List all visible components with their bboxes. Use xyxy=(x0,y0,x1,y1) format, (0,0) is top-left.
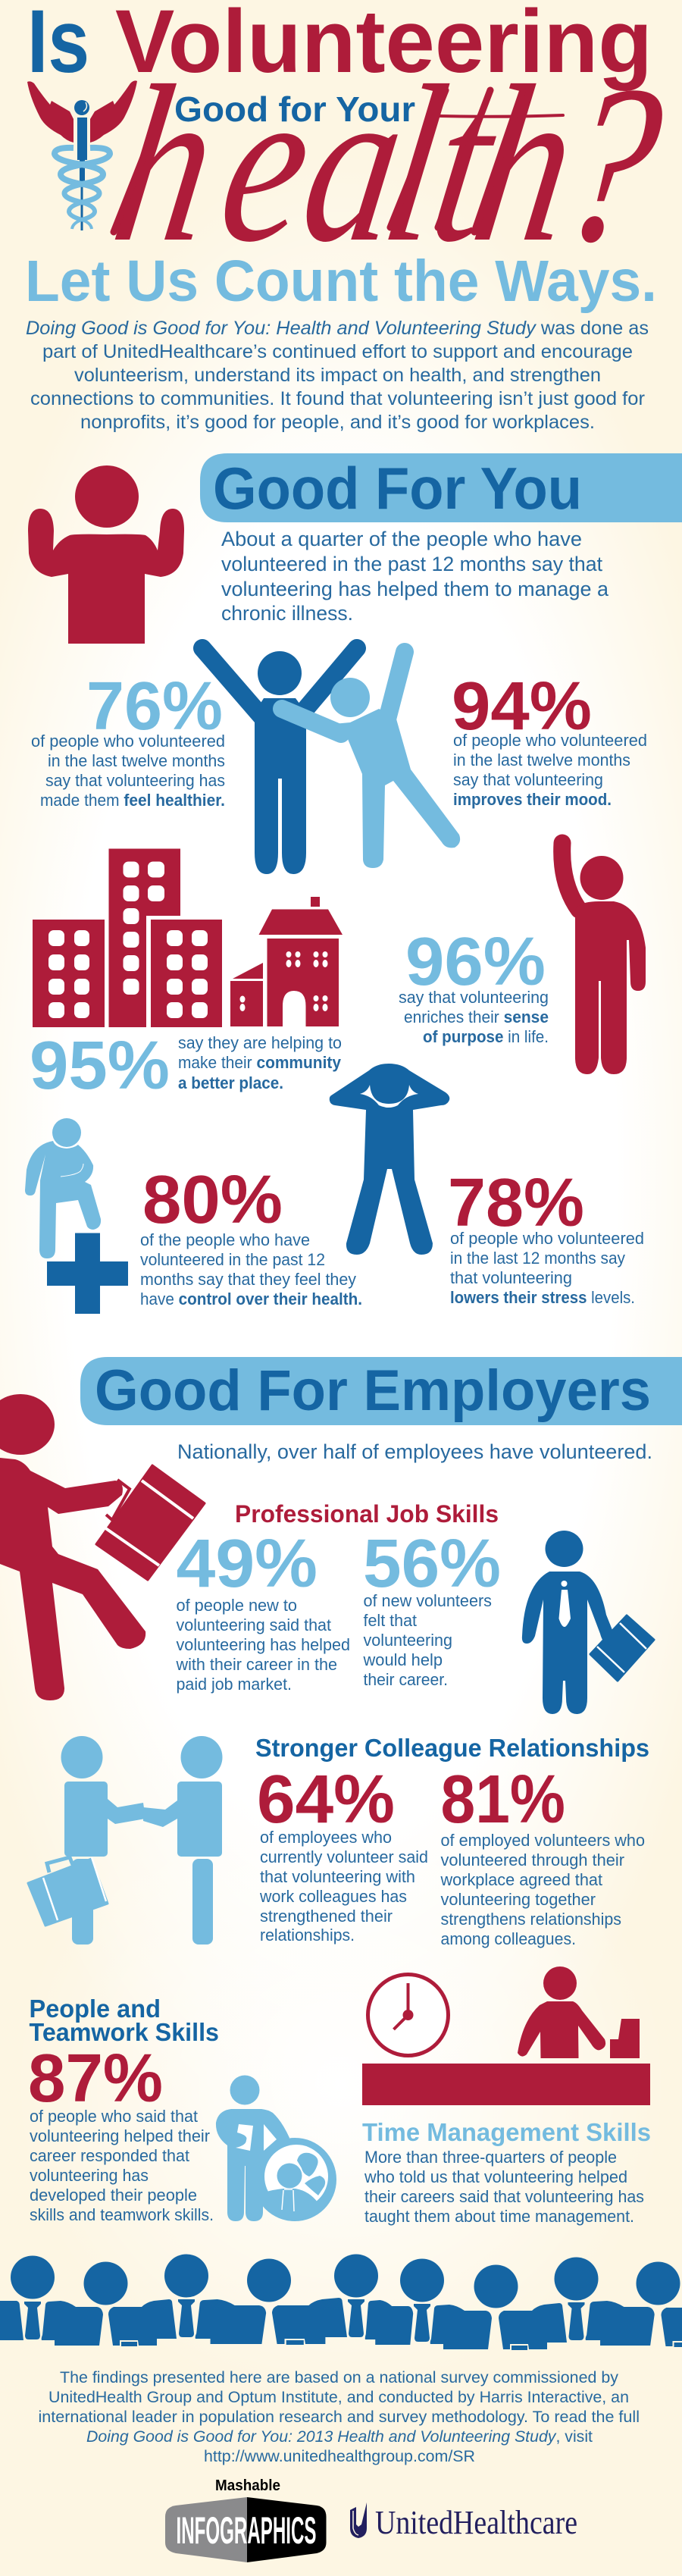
stat: 80%: have control over their health. xyxy=(140,1290,362,1308)
stat: 49%: with their career in the xyxy=(176,1655,337,1674)
title: Let Us Count the Ways. xyxy=(25,249,657,314)
stat: 81%: strengthens relationships xyxy=(441,1910,621,1929)
stat: 87%: of people who said that xyxy=(30,2107,198,2126)
stat: 64%: currently volunteer said xyxy=(260,1847,428,1866)
panel: good for you banner: Good For You xyxy=(213,455,582,522)
stat: 56%: of new volunteers xyxy=(364,1591,492,1610)
stat: 96% xyxy=(399,924,549,1046)
stat: 76%: say that volunteering has xyxy=(45,771,225,790)
footer text xyxy=(38,2368,640,2465)
stat: 64%: 64% xyxy=(257,1762,395,1838)
stat: 81%: volunteered through their xyxy=(441,1851,624,1869)
section: time management skills: Time Management Skills xyxy=(362,2118,651,2146)
stat: 87% xyxy=(28,2041,214,2224)
heading: professional job skills: Professional Job Skills xyxy=(235,1500,499,1528)
stat: 76% xyxy=(31,669,225,810)
icon: person stepping onto medical plus xyxy=(25,1118,128,1314)
stat: 87%: 87% xyxy=(28,2041,163,2117)
stat: 64%: of employees who xyxy=(260,1828,392,1847)
stat: 78% xyxy=(448,1165,644,1307)
text: nationally: Nationally, over half of employees have volunteered. xyxy=(177,1440,652,1463)
logo: unitedhealthcare: UnitedHealthcare xyxy=(375,2504,577,2541)
stat: 94%: say that volunteering xyxy=(453,770,603,789)
stat: 49%: volunteering has helped xyxy=(176,1635,350,1654)
section: time management skills: who told us that volunteering helped xyxy=(364,2167,627,2186)
text: chronic illness: chronic illness. xyxy=(221,602,353,625)
text: chronic illness xyxy=(221,528,608,625)
title: health? xyxy=(101,39,677,288)
stat: 81%: among colleagues. xyxy=(441,1929,576,1948)
stat: 56%: 56% xyxy=(363,1526,501,1602)
stat: 80%: 80% xyxy=(142,1162,283,1238)
stat: 81%: workplace agreed that xyxy=(440,1870,602,1889)
stat: 94%: in the last twelve months xyxy=(453,751,630,769)
stat: 49%: paid job market. xyxy=(176,1675,292,1694)
stat: 49% xyxy=(176,1526,350,1694)
icon: person raising hand xyxy=(562,843,646,1074)
stat: 49%: 49% xyxy=(176,1526,318,1602)
stat: 81%: 81% xyxy=(441,1762,565,1838)
stat: 94%: 94% xyxy=(452,669,592,744)
stat: 95%: make their community xyxy=(178,1053,342,1072)
text: chronic illness: volunteering has helped them to manage a xyxy=(221,578,608,600)
text: chronic illness: volunteered in the past 12 months say that xyxy=(221,553,603,575)
intro text: volunteerism, understand its impact on health, and strengthen xyxy=(74,365,601,386)
title: Good for Your xyxy=(174,89,415,129)
icon: row of business people xyxy=(0,2255,682,2350)
panel: good for employers banner: Good For Employers xyxy=(95,1359,651,1423)
stat: 94%: improves their mood. xyxy=(453,790,612,809)
stat: 76%: 76% xyxy=(86,669,223,744)
stat: 78%: that volunteering xyxy=(450,1268,572,1287)
stat: 80% xyxy=(140,1162,362,1308)
heading: people and teamwork skills: People and xyxy=(29,1995,161,2023)
stat: 78%: lowers their stress levels. xyxy=(450,1288,635,1307)
section: time management skills: their careers said that volunteering has xyxy=(364,2187,644,2206)
stat: 96%: say that volunteering xyxy=(399,988,549,1007)
stat: 81%: of employed volunteers who xyxy=(441,1831,645,1850)
footer text: UnitedHealth Group and Optum Institute, and conducted by Harris Interactive, an xyxy=(48,2388,629,2406)
stat: 78%: 78% xyxy=(448,1165,584,1241)
icon: two cheering people xyxy=(202,648,460,874)
intro text: part of UnitedHealthcare’s continued effort to support and encourage xyxy=(42,341,633,362)
stat: 64%: work colleagues has xyxy=(259,1887,407,1906)
stat: 76%: made them feel healthier. xyxy=(40,791,225,810)
logo: mashable infographics: INFOGRAPHICS xyxy=(176,2509,317,2552)
stat: 95%: say they are helping to xyxy=(178,1033,342,1052)
stat: 87%: developed their people xyxy=(30,2186,197,2205)
icon: walking business person with briefcase xyxy=(0,1394,205,1700)
stat: 76%: of people who volunteered xyxy=(31,732,225,751)
icon: two colleagues shaking hands xyxy=(28,1736,223,1945)
stat: 56% xyxy=(363,1526,501,1689)
stat: 96%: enriches their sense xyxy=(404,1008,549,1026)
stat: 94% xyxy=(452,669,647,809)
heading: stronger colleague relationships: Stronger Colleague Relationships xyxy=(255,1734,649,1762)
section: time management skills xyxy=(362,2118,651,2226)
footer text: international leader in population research and survey methodology. To read the full xyxy=(38,2408,640,2426)
stat: 64% xyxy=(257,1762,428,1945)
stat: 78%: in the last 12 months say xyxy=(450,1249,625,1268)
icon: clock xyxy=(368,1974,449,2056)
section: time management skills: More than three-quarters of people xyxy=(364,2148,617,2167)
icon: stressed person with hands behind head xyxy=(330,1064,449,1255)
stat: 64%: that volunteering with xyxy=(260,1867,415,1886)
stat: 87%: volunteering has xyxy=(30,2166,149,2185)
stat: 56%: felt that xyxy=(364,1611,417,1630)
text: chronic illness: About a quarter of the people who have xyxy=(221,528,582,550)
stat: 87%: career responded that xyxy=(30,2146,189,2165)
icon: person at desk with register xyxy=(362,1966,650,2105)
logo: mashable infographics: Mashable xyxy=(215,2477,280,2494)
stat: 95%: a better place. xyxy=(178,1073,283,1092)
stat: 49%: volunteering said that xyxy=(176,1615,331,1634)
stat: 95% xyxy=(30,1028,342,1104)
stat: 56%: their career. xyxy=(364,1670,448,1689)
footer text: Doing Good is Good for You: 2013 Health and Volunteering Study, visit xyxy=(86,2427,593,2446)
icon: person holding team circle xyxy=(216,2076,336,2221)
logo: mashable infographics xyxy=(165,2477,326,2562)
icon: city buildings and house xyxy=(33,849,343,1027)
stat: 76%: in the last twelve months xyxy=(48,751,225,770)
icon: business person with tie and briefcase xyxy=(522,1531,654,1714)
stat: 78%: of people who volunteered xyxy=(450,1229,644,1248)
stat: 64%: strengthened their xyxy=(260,1907,393,1926)
intro text: nonprofits, it’s good for people, and it’s good for workplaces. xyxy=(80,412,595,433)
stat: 80%: of the people who have xyxy=(140,1230,310,1249)
footer text: The findings presented here are based on a national survey commissioned by xyxy=(60,2368,618,2386)
stat: 80%: months say that they feel they xyxy=(140,1270,356,1289)
stat: 56%: volunteering xyxy=(364,1631,452,1650)
intro text: connections to communities. It found that volunteering isn’t just good for xyxy=(30,388,645,409)
heading: people and teamwork skills: Teamwork Skills xyxy=(29,2018,219,2046)
intro text: Doing Good is Good for You: Health and Volunteering Study was done as xyxy=(26,318,649,339)
stat: 96%: of purpose in life. xyxy=(423,1027,549,1046)
icon: flexing person xyxy=(28,465,184,644)
intro text xyxy=(26,318,649,433)
stat: 87%: skills and teamwork skills. xyxy=(30,2205,214,2224)
stat: 56%: would help xyxy=(363,1650,443,1669)
stat: 81%: volunteering together xyxy=(441,1890,596,1909)
stat: 80%: volunteered in the past 12 xyxy=(140,1250,325,1269)
footer text: http://www.unitedhealthgroup.com/SR xyxy=(204,2447,475,2465)
section: time management skills: taught them about time management. xyxy=(364,2207,634,2226)
stat: 94%: of people who volunteered xyxy=(453,731,647,750)
icon: caring hands with caduceus xyxy=(27,80,137,230)
stat: 95%: 95% xyxy=(30,1028,170,1104)
stat: 49%: of people new to xyxy=(176,1596,297,1615)
stat: 87%: volunteering helped their xyxy=(30,2126,210,2145)
stat: 96%: 96% xyxy=(405,924,546,1000)
stat: 64%: relationships. xyxy=(260,1926,355,1945)
stat: 81% xyxy=(440,1762,645,1948)
heading: people and teamwork skills xyxy=(29,1995,219,2046)
